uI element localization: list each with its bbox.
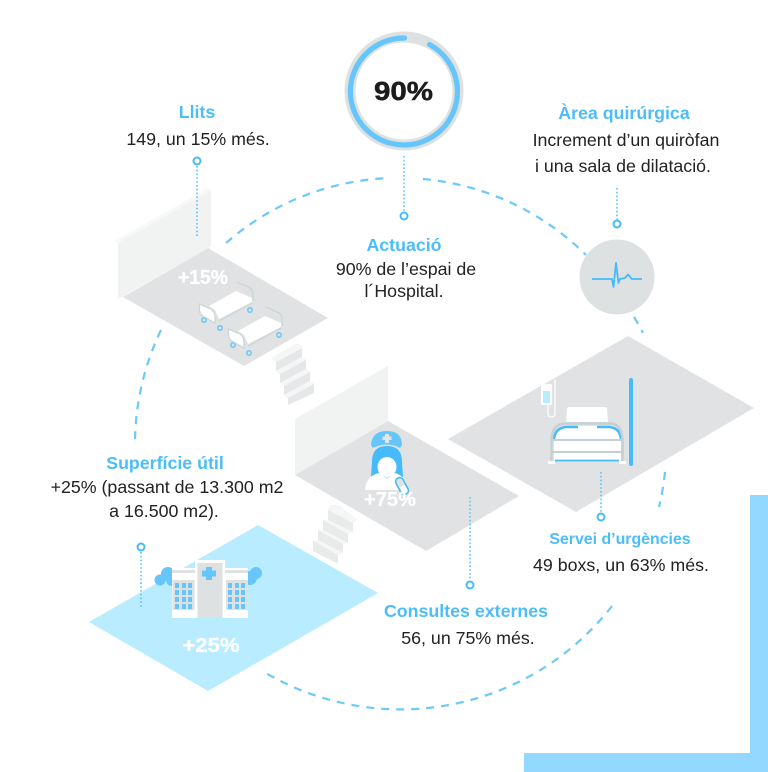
icon: hospital bbox=[154, 560, 262, 618]
connector: urgencies bbox=[598, 472, 604, 520]
text: consultes externes: Consultes externes bbox=[384, 601, 548, 621]
text: servei urgencies: 49 boxs, un 63% més. bbox=[533, 555, 709, 575]
icon: emergency bed bbox=[541, 378, 633, 466]
text: llits bbox=[126, 102, 270, 149]
percent value: 90% bbox=[374, 76, 433, 106]
corner frame bbox=[524, 495, 768, 772]
connector: area quirurgica bbox=[614, 188, 620, 228]
icon: bed 1 bbox=[200, 282, 253, 330]
icon: ECG circle bbox=[580, 240, 654, 314]
dashed circle bbox=[135, 178, 665, 709]
text: superficie util bbox=[51, 453, 283, 521]
text: actuacio: 90% de l’espai de bbox=[336, 259, 476, 279]
text: area quirurgica bbox=[533, 102, 719, 176]
connector: actuacio bbox=[400, 156, 408, 220]
text: servei urgencies bbox=[533, 531, 709, 575]
text: area quirurgica: Increment d’un quiròfan bbox=[533, 130, 719, 150]
text: superficie util: a 16.500 m2). bbox=[109, 501, 219, 521]
text: area quirurgica: Àrea quirúrgica bbox=[558, 102, 690, 123]
panel: blue floor bbox=[89, 525, 378, 691]
text: actuacio bbox=[336, 235, 476, 301]
connector: superficie bbox=[138, 544, 144, 607]
panel: urgencies floor bbox=[448, 336, 754, 512]
text: superficie util: +25% (passant de 13.300 m2 bbox=[51, 477, 283, 497]
connector: llits bbox=[194, 158, 200, 236]
panel: llits wall bbox=[115, 188, 211, 299]
stairs upper bbox=[271, 343, 315, 405]
panel: consultes floor bbox=[295, 421, 519, 551]
text: actuacio: l´Hospital. bbox=[364, 281, 444, 301]
icon: nurse bbox=[365, 431, 410, 496]
stairs lower bbox=[313, 505, 358, 564]
text: servei urgencies: Servei d’urgències bbox=[549, 531, 691, 548]
label: +15%: +15% bbox=[178, 267, 228, 289]
text: consultes externes bbox=[384, 601, 548, 648]
connector: consultes bbox=[466, 497, 474, 588]
label: +25%: +25% bbox=[182, 635, 240, 657]
text: llits: 149, un 15% més. bbox=[126, 129, 270, 149]
text: llits: Llits bbox=[179, 102, 215, 122]
text: area quirurgica: i una sala de dilatació. bbox=[535, 156, 711, 176]
label: +75%: +75% bbox=[364, 489, 416, 511]
text: consultes externes: 56, un 75% més. bbox=[401, 628, 535, 648]
icon: bed 2 bbox=[228, 307, 282, 355]
text: actuacio: Actuació bbox=[366, 235, 442, 255]
panel: consultes wall bbox=[295, 366, 388, 475]
progress ring 90% bbox=[350, 37, 458, 145]
text: superficie util: Superfície útil bbox=[106, 453, 224, 473]
panel: llits floor bbox=[123, 248, 328, 366]
